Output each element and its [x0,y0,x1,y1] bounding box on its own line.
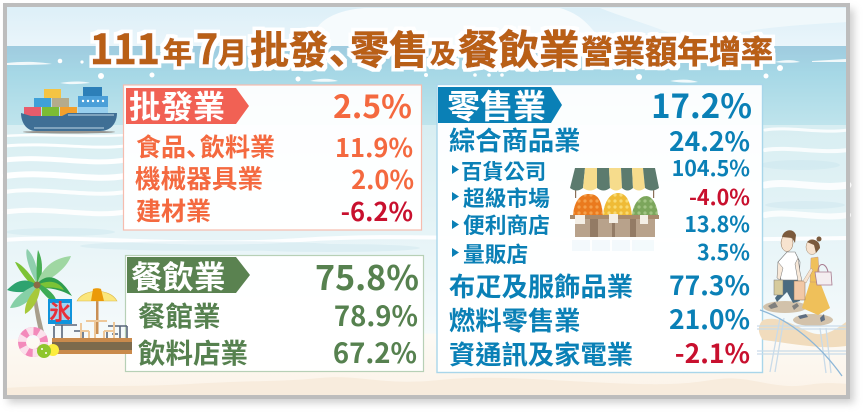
row: food and beverage [136,128,413,165]
tag: food service: 餐飲業 [131,252,226,298]
icon: palm tree beach cafe [7,249,132,358]
row: supermarkets: -4.0% [689,181,750,212]
row: ICT and appliances [449,332,750,372]
row: general merchandise: 24.2% [669,120,750,159]
row: machinery: 2.0% [351,160,414,197]
row: building materials: -6.2% [341,192,413,229]
row: textiles and apparel [449,264,750,304]
row: building materials: 建材業 [136,192,211,228]
title: 營業額年增率 [581,27,773,73]
row: beverage shops: 67.2% [333,331,417,371]
icon: fruit market stall [570,168,659,251]
row: ICT and appliances: 資通訊及家電業 [449,333,633,372]
row: restaurants [138,294,418,334]
row: supermarkets [452,181,750,213]
row: beverage shops [138,331,417,371]
row: restaurants: 78.9% [334,294,418,334]
row: department stores: 百貨公司 [461,155,546,186]
row: fuel [449,298,750,338]
row: machinery: 機械器具業 [135,159,263,196]
row: ICT and appliances: -2.1% [675,332,750,371]
figure: food service total: 75.8% [315,251,419,300]
panel: wholesale [124,82,422,230]
row: hypermarkets [452,236,750,269]
row: fuel: 21.0% [669,298,750,337]
title: 餐飲業 [458,17,580,76]
row: convenience stores: 13.8% [684,208,750,239]
panel: food service [126,251,424,372]
row: department stores [452,152,750,186]
title: 月 [218,30,247,72]
row: building materials [136,192,413,229]
row: convenience stores: 便利商店 [463,209,550,240]
umbrella [77,288,117,334]
row: food and beverage: 飲料業 [200,128,275,164]
row: convenience stores [452,208,750,240]
row: textiles and apparel: 77.3% [669,264,750,303]
wooden deck [52,338,132,354]
title: 111 [90,16,160,76]
row: supermarkets: 超級市場 [463,182,550,213]
row: food and beverage: 食品 [136,128,186,164]
title: 零售 [350,20,428,76]
panel: retail [437,80,762,372]
tag: retail: 零售業 [447,80,546,128]
row: beverage shops: 飲料店業 [138,331,248,371]
figure: wholesale total: 2.5% [333,82,412,128]
map lines and sand patch [757,301,846,376]
woman [794,236,832,322]
title: 批發 [250,20,328,76]
row: general merchandise: 綜合商品業 [449,119,580,158]
swim ring and ball [22,331,59,358]
cafe tables and chairs [54,321,127,338]
row: fuel: 燃料零售業 [449,299,580,338]
row: food and beverage: 11.9% [335,128,413,165]
icon: container ship [21,87,117,134]
row: machinery [135,159,414,197]
tag: wholesale: 批發業 [129,82,225,128]
row: food and beverage: 、 [186,128,211,164]
man [768,230,802,310]
row: hypermarkets: 3.5% [697,236,750,267]
ice sign: 氷 [49,295,71,327]
title: 及 [430,34,456,71]
row: general merchandise [449,119,750,159]
row: textiles and apparel: 布疋及服飾品業 [449,265,633,304]
title: 7 [196,16,218,76]
title: 年 [163,30,192,72]
icon: couple walking with shopping bags [757,230,846,376]
palm tree [7,249,72,338]
row: department stores: 104.5% [672,152,750,183]
row: hypermarkets: 量販店 [463,238,528,269]
row: restaurants: 餐館業 [138,294,220,334]
title: 、 [329,20,368,76]
title [90,16,773,76]
figure: retail total: 17.2% [651,80,752,128]
